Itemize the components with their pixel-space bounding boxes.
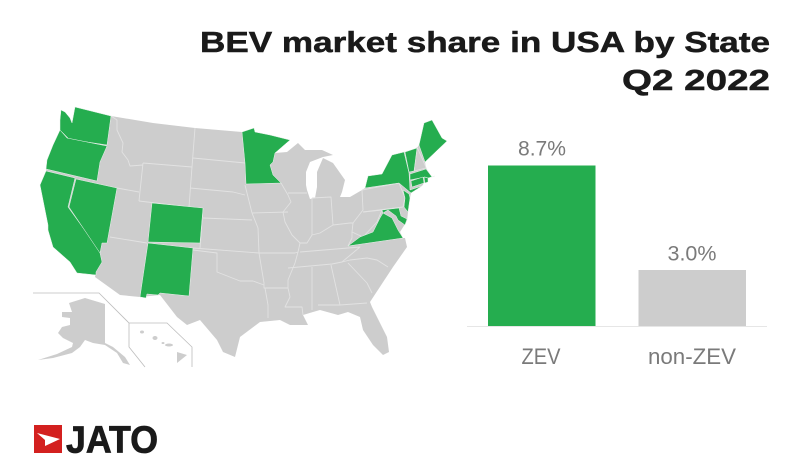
state: Hawaii [140,330,187,363]
state: New Jersey [403,190,410,212]
state: Oregon [46,130,107,181]
state: Washington [60,107,111,145]
state: Nevada [69,179,117,253]
state: New York [365,152,422,193]
map: United States by state [33,107,447,367]
state: New Mexico [140,243,193,298]
logo mark [34,425,62,453]
label: ZEV: ZEV [522,344,561,369]
state: Rhode Island [424,177,428,183]
value: ZEV: 8.7% [518,136,566,160]
state: Maine [419,120,447,162]
mainland silhouette [46,116,447,357]
state: Maryland [382,208,407,225]
state: Alaska [38,298,130,365]
state: Massachusetts [410,169,435,180]
label: non-ZEV: non-ZEV [648,344,736,369]
bar: non-ZEV [638,270,746,326]
state: Vermont [405,148,417,172]
state borders [110,116,426,318]
baseline [467,326,767,328]
state: California [40,171,102,275]
value: non-ZEV: 3.0% [668,242,716,266]
bar: ZEV [488,166,596,326]
logo wordmark: JATO [66,420,158,462]
JATO logo [34,420,158,462]
state: Delaware [400,208,407,219]
state: Colorado [148,203,203,243]
title [200,27,770,97]
state: Virginia [348,213,403,246]
state: Connecticut [411,177,424,187]
title: Q2 2022 [622,65,770,97]
bar chart [467,136,767,369]
state: Minnesota [242,128,290,184]
title: BEV market share in USA by State [200,27,770,59]
inset frame lines [33,293,192,367]
